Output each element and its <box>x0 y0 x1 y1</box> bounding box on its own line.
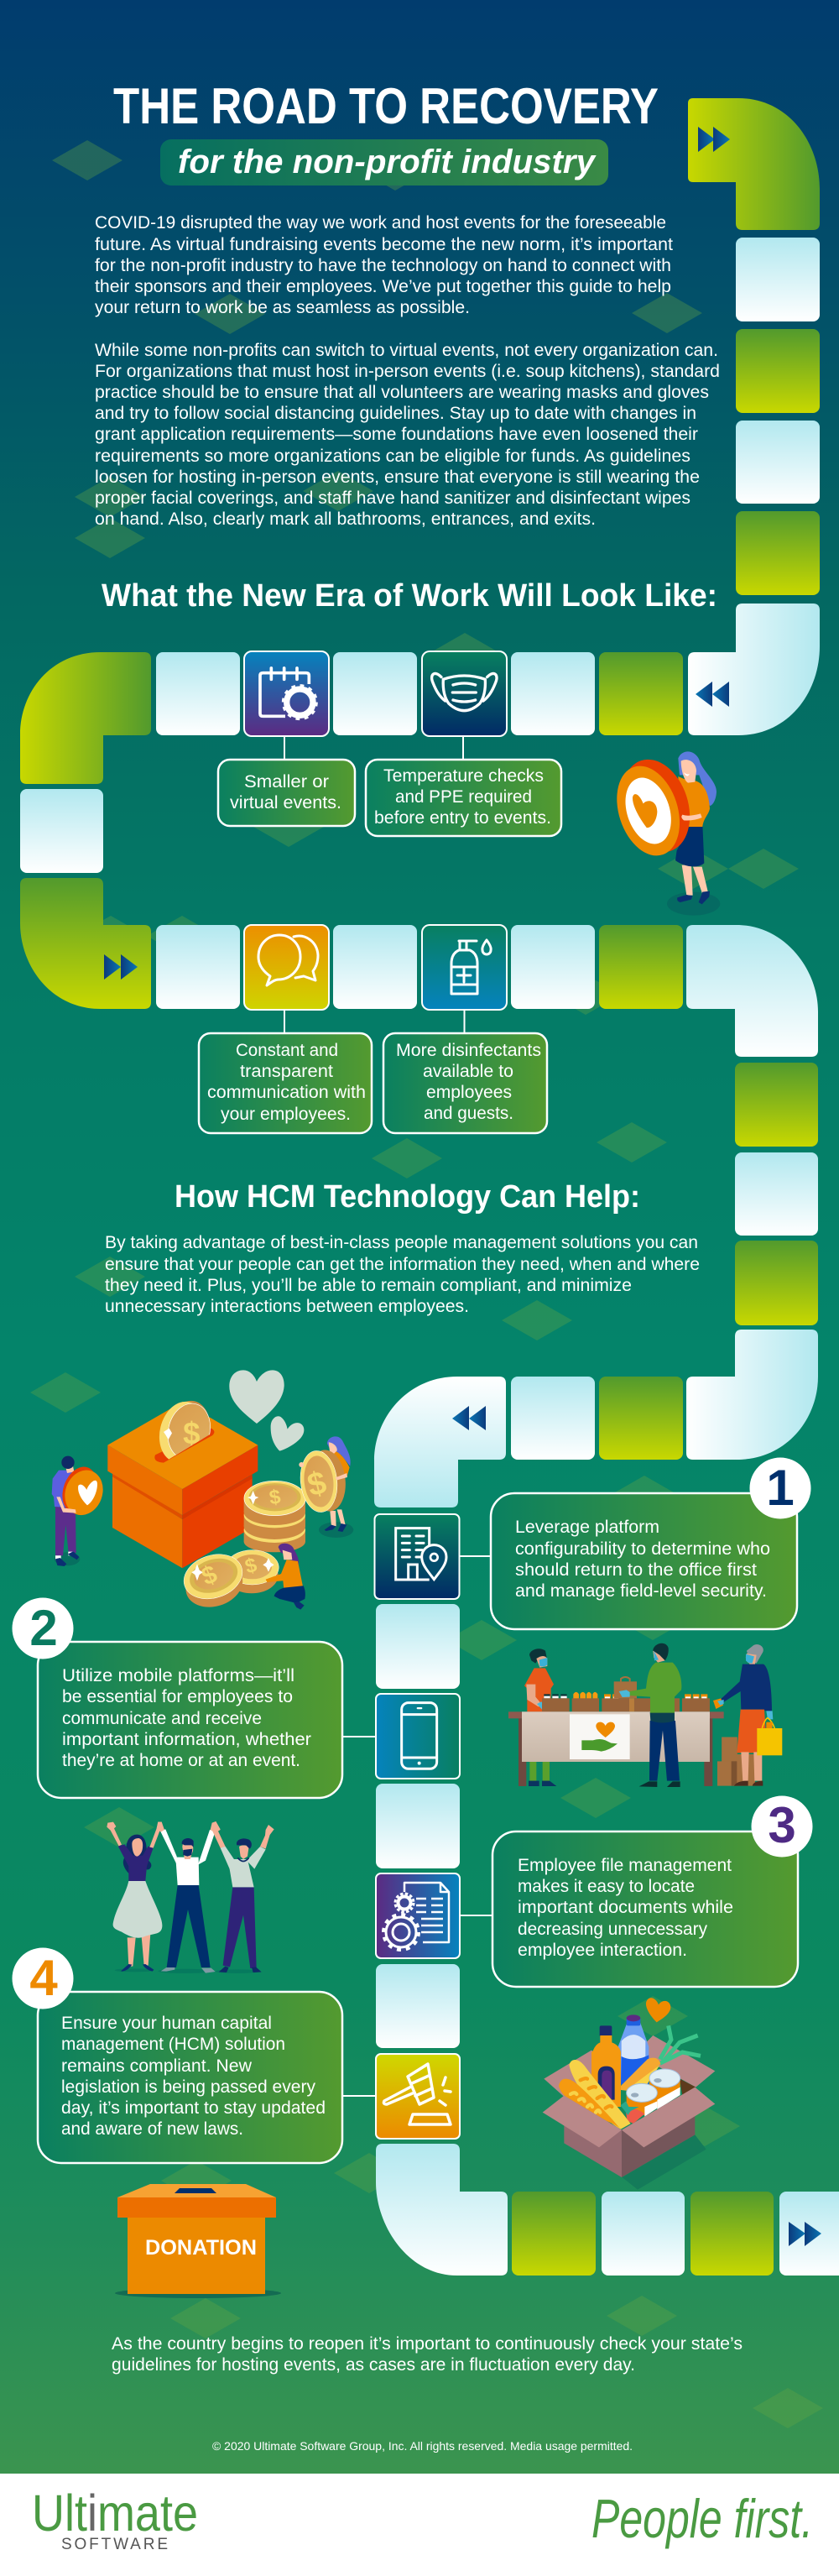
step 4 card: legislation is being passed every <box>61 2077 315 2097</box>
ground coins: $ <box>198 1560 221 1591</box>
step 4 card <box>12 1947 377 2163</box>
intro paragraph 2: requirements so more organizations can be eligible for funds. As guidelines <box>95 447 690 466</box>
illustration: donation box with coins and people <box>52 1370 353 1614</box>
woman holding coin <box>298 1436 353 1538</box>
HCM paragraph <box>105 1233 700 1316</box>
icon: building with location pin <box>374 1514 460 1599</box>
step 4 card: day, it’s important to stay updated <box>61 2098 326 2118</box>
step 3 card: Employee file management <box>518 1856 732 1875</box>
callout: smaller or virtual events <box>218 736 355 826</box>
callout: more disinfectants: More disinfectants <box>396 1041 541 1060</box>
step number 3 <box>752 1796 812 1857</box>
callout: constant communication: your employees. <box>221 1105 351 1124</box>
step number 2: 2 <box>29 1600 58 1656</box>
callout: smaller or virtual events: Smaller or <box>244 772 329 792</box>
step number 3: 3 <box>768 1797 796 1853</box>
step 2 card: important information, whether <box>62 1730 311 1749</box>
intro paragraph 2 <box>95 341 720 529</box>
HCM paragraph: they need it. Plus, you’ll be able to remain compliant, and minimize <box>105 1276 632 1295</box>
heading: how HCM technology can help: How HCM Technology Can Help: <box>175 1179 640 1215</box>
step number 1 <box>750 1457 810 1519</box>
intro paragraph 1: their sponsors and their employees. We’ve put together this guide to help <box>95 277 671 296</box>
board game track: row one and left bend <box>20 652 683 1009</box>
illustration: donation box <box>115 2184 281 2298</box>
HCM paragraph: unnecessary interactions between employees. <box>105 1297 469 1316</box>
intro paragraph 2: grant application requirements—some foundations have even loosened their <box>95 425 698 444</box>
icon: document with gears <box>376 1873 460 1958</box>
logo: Ultimate Software: Ultimate <box>32 2485 198 2542</box>
step number 2 <box>12 1598 74 1659</box>
man holding heart coin <box>52 1456 109 1566</box>
icon: calendar with gear <box>244 651 329 736</box>
step 2 card: Utilize mobile platforms—it’ll <box>62 1666 294 1685</box>
step 3 card: decreasing unnecessary <box>518 1920 707 1939</box>
callout: temperature checks: and PPE required <box>395 787 532 807</box>
ground coins <box>178 1547 279 1614</box>
intro paragraph 2: While some non-profits can switch to virtual events, not every organization can. <box>95 341 718 360</box>
illustration: woman holding heart coin <box>606 750 720 916</box>
step 3 card: employee interaction. <box>518 1941 687 1960</box>
step 1 card: configurability to determine who <box>515 1539 770 1559</box>
step number 4 <box>12 1947 74 2009</box>
intro paragraph 1: COVID-19 disrupted the way we work and host events for the foreseeable <box>95 213 666 233</box>
callout: temperature checks: before entry to events. <box>374 808 551 828</box>
step 3 card: important documents while <box>518 1898 733 1917</box>
step 2 card: be essential for employees to <box>62 1687 293 1706</box>
callout: more disinfectants: available to <box>423 1062 513 1081</box>
intro paragraph 2: For organizations that must host in-person events (i.e. soup kitchens), standard <box>95 362 720 381</box>
woman holding coin: $ <box>304 1465 330 1504</box>
icon: speech bubbles <box>244 925 329 1010</box>
intro paragraph 2: proper facial coverings, and staff have hand sanitizer and disinfectant wipes <box>95 489 690 508</box>
intro paragraph 1: your return to work be as seamless as possible. <box>95 298 470 317</box>
step 4 card: and aware of new laws. <box>61 2119 243 2139</box>
step 4 card: Ensure your human capital <box>61 2014 272 2033</box>
step 1 card: and manage field-level security. <box>515 1581 767 1601</box>
title: THE ROAD TO RECOVERY <box>113 78 659 134</box>
illustration: food donation box <box>543 1998 715 2190</box>
step 3 card: makes it easy to locate <box>518 1877 695 1896</box>
icon: hand sanitizer bottle <box>422 925 507 1010</box>
closing text <box>112 2334 743 2375</box>
board game track: middle turn and center column <box>374 1377 839 2276</box>
step 2 card: communicate and receive <box>62 1709 262 1728</box>
step 1 card: Leverage platform <box>515 1518 659 1537</box>
footer band <box>0 2474 839 2576</box>
step number 4: 4 <box>29 1950 58 2006</box>
heading: new era of work: What the New Era of Work Will Look Like: <box>102 578 717 614</box>
closing text: guidelines for hosting events, as cases are in fluctuation every day. <box>112 2355 635 2375</box>
callout: more disinfectants: and guests. <box>424 1104 513 1123</box>
coin stack <box>244 1481 305 1552</box>
step 2 card <box>12 1598 377 1798</box>
callout: smaller or virtual events: virtual events. <box>230 793 341 813</box>
coin stack: $ <box>268 1486 282 1509</box>
icon: mobile phone <box>376 1694 460 1779</box>
HCM paragraph: By taking advantage of best-in-class people management solutions you can <box>105 1233 698 1252</box>
illustration: donation box with coins and people: $ <box>183 1416 201 1450</box>
logo: Ultimate Software: SOFTWARE <box>61 2536 168 2553</box>
step 1 card: should return to the office first <box>515 1560 757 1580</box>
board game track: row two and right column <box>156 925 818 1460</box>
step number 1: 1 <box>766 1460 795 1516</box>
board game track: top right column <box>688 98 820 735</box>
intro paragraph 2: on hand. Also, clearly mark all bathrooms, entrances, and exits. <box>95 509 596 529</box>
illustration: donation box: DONATION <box>145 2236 257 2260</box>
step 3 card <box>460 1796 812 1987</box>
icon: gavel <box>376 2054 460 2139</box>
ground coins: $ <box>242 1554 259 1579</box>
intro paragraph 1: future. As virtual fundraising events become the new norm, it’s important <box>95 235 673 254</box>
kneeling woman <box>266 1544 305 1610</box>
callout: constant communication: Constant and <box>236 1041 338 1060</box>
intro paragraph 1: for the non-profit industry to have the technology on hand to connect with <box>95 256 671 275</box>
subtitle pill: for the non-profit industry <box>178 144 597 180</box>
callout: constant communication: communication with <box>207 1083 366 1102</box>
illustration: three people with raised hands <box>107 1821 274 1973</box>
illustration: volunteers at food table <box>508 1643 782 1787</box>
callout: temperature checks: Temperature checks <box>383 766 544 786</box>
HCM paragraph: ensure that your people can get the information they need, when and where <box>105 1255 700 1274</box>
callout: constant communication <box>199 1010 372 1133</box>
callout: temperature checks <box>366 736 561 836</box>
callout: more disinfectants <box>383 1010 547 1133</box>
step 2 card: they’re at home or at an event. <box>62 1751 300 1770</box>
intro paragraph 2: loosen for hosting in-person events, ensure that everyone is still wearing the <box>95 468 700 487</box>
intro paragraph 2: and try to follow social distancing guidelines. Stay up to date with changes in <box>95 404 696 423</box>
callout: constant communication: transparent <box>240 1062 333 1081</box>
step 4 card: remains compliant. New <box>61 2056 253 2076</box>
icon: face mask <box>422 651 507 736</box>
intro paragraph 1 <box>95 213 673 317</box>
step 4 card: management (HCM) solution <box>61 2035 285 2054</box>
callout: more disinfectants: employees <box>426 1083 512 1102</box>
closing text: As the country begins to reopen it’s important to continuously check your state’s <box>112 2334 743 2354</box>
step 1 card <box>460 1457 810 1629</box>
copyright: © 2020 Ultimate Software Group, Inc. All rights reserved. Media usage permitted. <box>212 2439 633 2453</box>
intro paragraph 2: practice should be to ensure that all volunteers are wearing masks and gloves <box>95 383 709 402</box>
